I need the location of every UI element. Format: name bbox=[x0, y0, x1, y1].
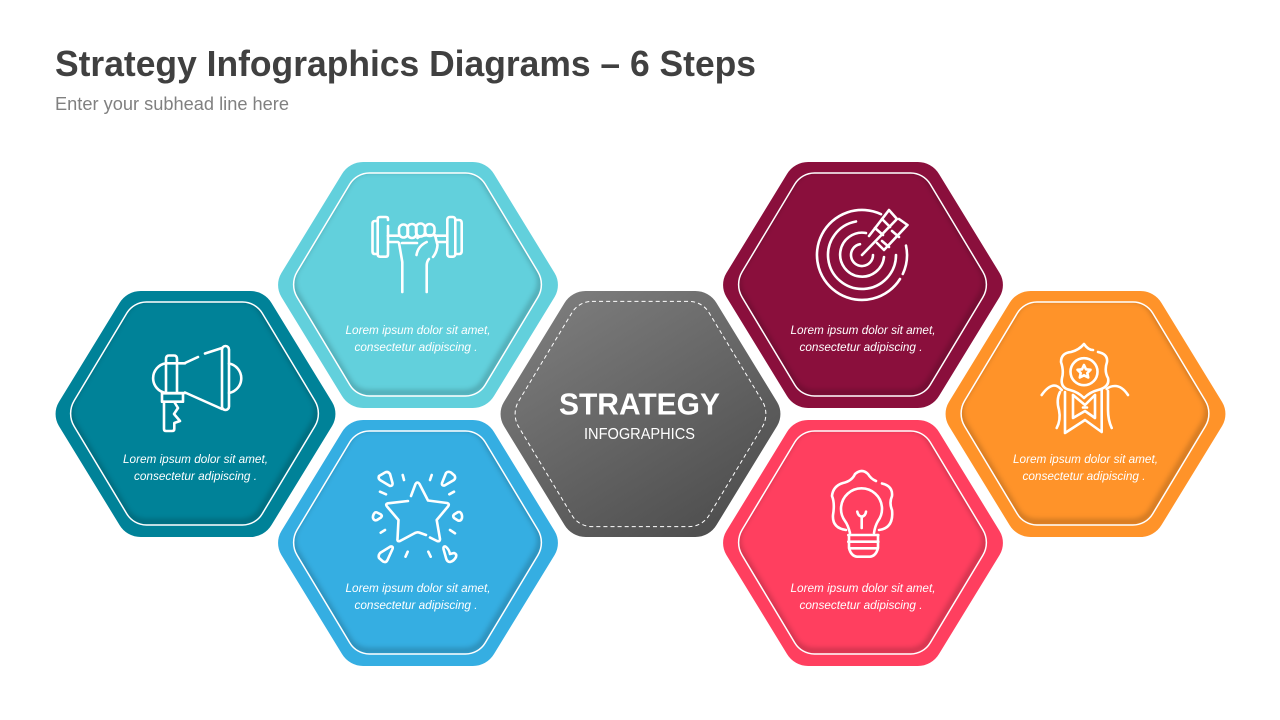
text block: consectetur adipiscing . bbox=[134, 469, 257, 483]
hexagon: maroon bbox=[723, 162, 1003, 408]
panel: megaphone step bbox=[56, 291, 335, 537]
text block: consectetur adipiscing . bbox=[354, 598, 478, 612]
text block bbox=[123, 452, 268, 483]
text block: Lorem ipsum dolor sit amet, bbox=[346, 581, 490, 595]
text block: consectetur adipiscing . bbox=[354, 340, 478, 354]
hexagon: orange bbox=[946, 291, 1225, 537]
text block: Lorem ipsum dolor sit amet, bbox=[790, 581, 936, 595]
panel: medal step bbox=[946, 291, 1225, 537]
text block: Lorem ipsum dolor sit amet, bbox=[123, 452, 268, 466]
icon: light bulb bbox=[832, 471, 892, 557]
icon: target with arrow bbox=[817, 210, 908, 300]
text block: Lorem ipsum dolor sit amet, bbox=[1013, 452, 1158, 466]
hexagon: gray bbox=[501, 291, 780, 537]
panel: dumbbell step bbox=[278, 162, 558, 408]
panel: center strategy hexagon bbox=[501, 291, 780, 537]
text block: Lorem ipsum dolor sit amet, bbox=[790, 323, 936, 337]
text block: consectetur adipiscing . bbox=[800, 598, 922, 612]
subheading: infographics: INFOGRAPHICS bbox=[584, 426, 695, 443]
panel: target step bbox=[723, 162, 1003, 408]
hexagon: red bbox=[723, 420, 1003, 666]
hexagon: cyan bbox=[278, 162, 558, 408]
text block bbox=[790, 581, 936, 612]
title: Strategy Infographics Diagrams – 6 Steps bbox=[55, 43, 756, 84]
text block bbox=[1013, 452, 1158, 483]
icon: medal ribbon bbox=[1042, 344, 1128, 433]
text block bbox=[790, 323, 936, 354]
text block: Lorem ipsum dolor sit amet, bbox=[346, 323, 490, 337]
subtitle: Enter your subhead line here bbox=[55, 93, 289, 114]
text block bbox=[346, 323, 490, 354]
text block: consectetur adipiscing . bbox=[1022, 469, 1146, 483]
icon: star burst bbox=[373, 472, 462, 562]
text block: consectetur adipiscing . bbox=[800, 340, 922, 354]
heading: strategy: STRATEGY bbox=[559, 386, 720, 422]
panel: star step bbox=[278, 420, 558, 666]
icon: megaphone bbox=[153, 346, 241, 431]
panel: light bulb step bbox=[723, 420, 1003, 666]
hexagon: blue bbox=[278, 420, 558, 666]
icon: dumbbell in fist bbox=[372, 217, 462, 292]
text block bbox=[346, 581, 490, 612]
hexagon: teal bbox=[56, 291, 335, 537]
